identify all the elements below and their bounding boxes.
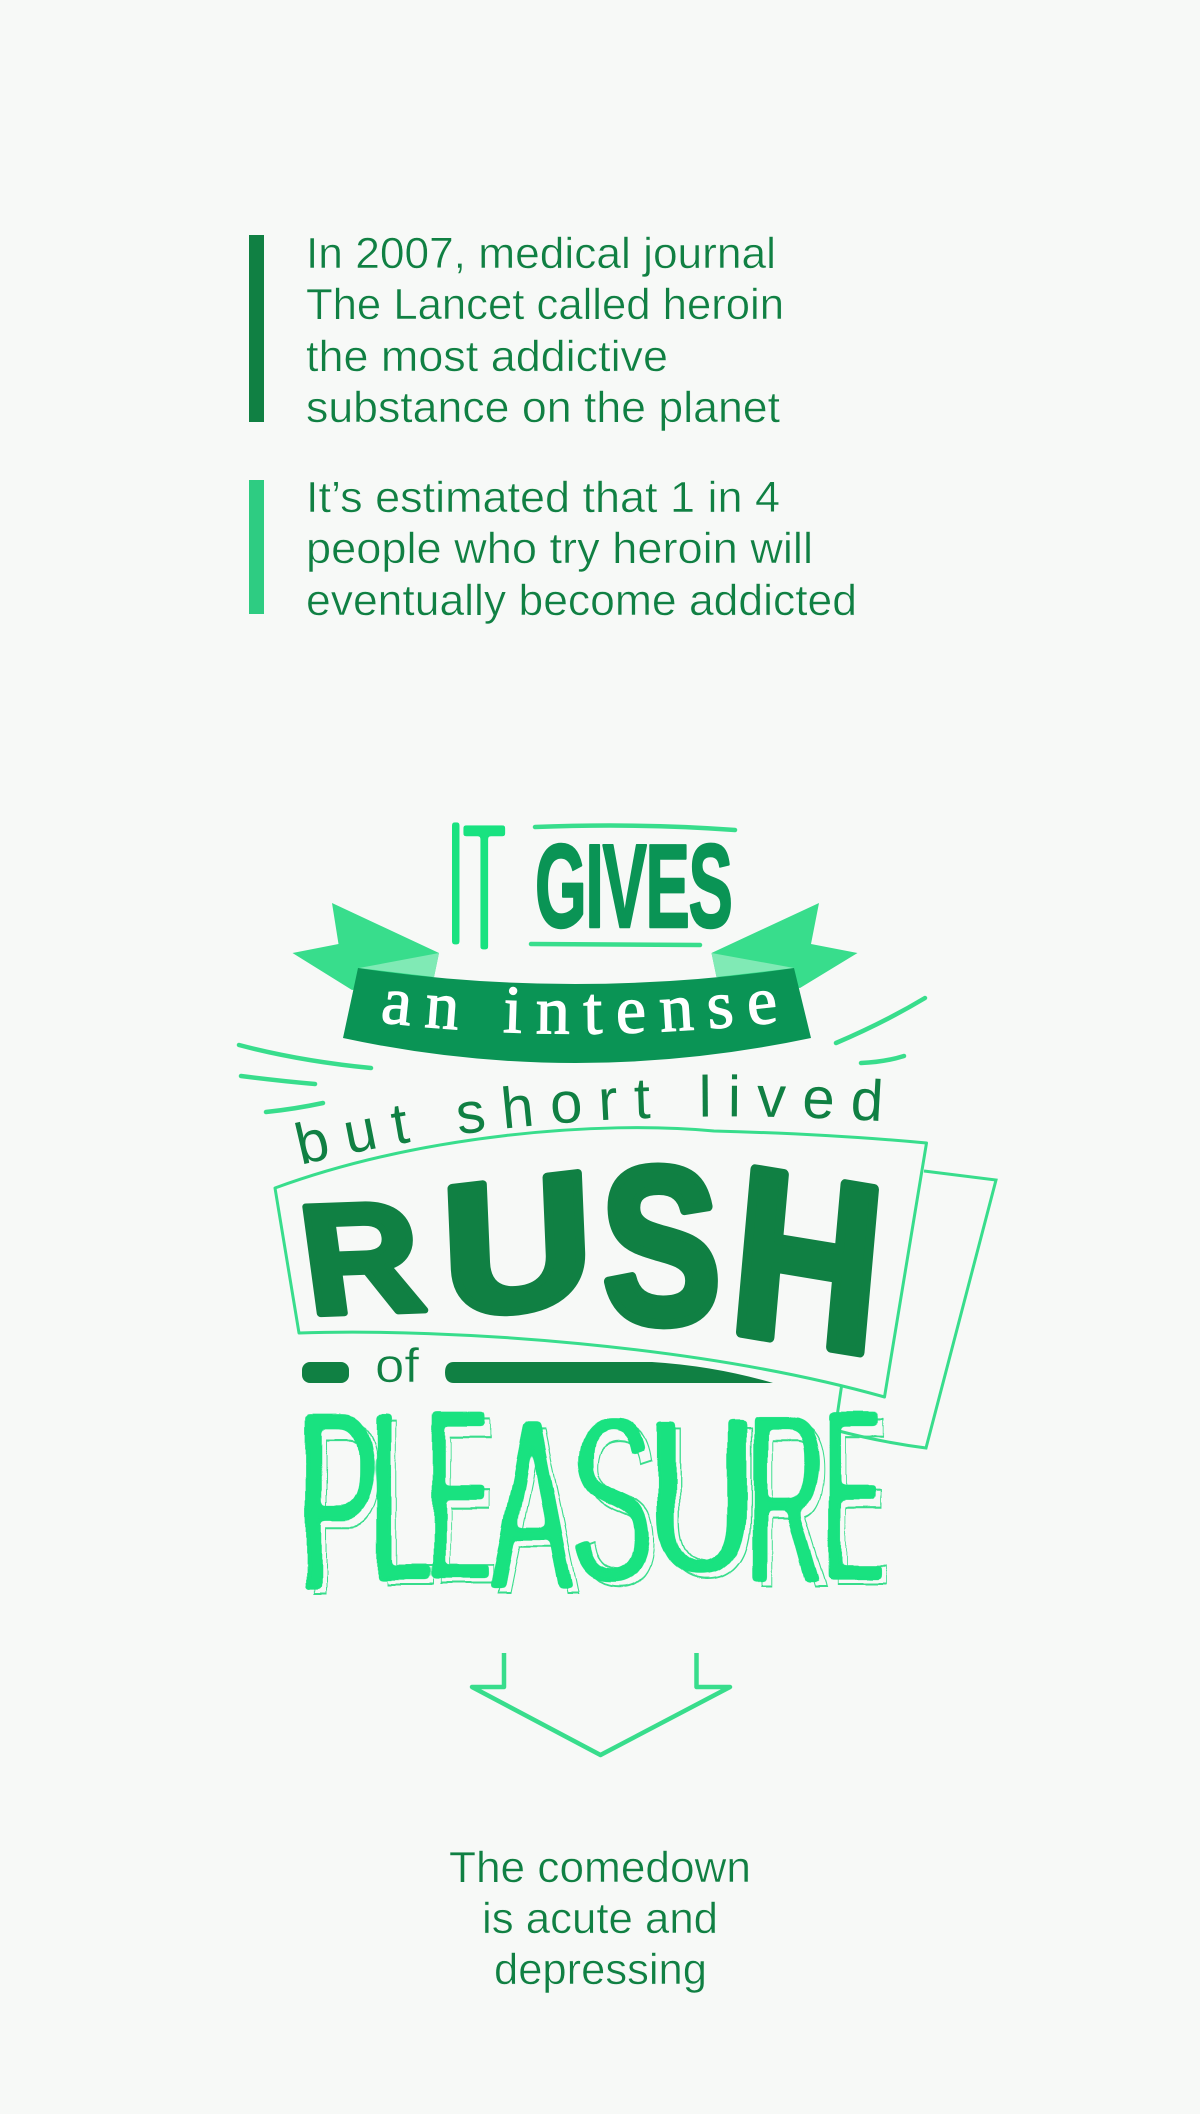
closing text: the comedown: is acute and xyxy=(482,1894,718,1943)
text: Lancet fact: The Lancet called heroin xyxy=(306,280,784,329)
typographic lockup: it gives an intense but short lived rush of pleasure xyxy=(236,783,998,1649)
headline word: PLEASURE: U xyxy=(648,1370,755,1624)
ribbon banner: an intense xyxy=(292,903,858,1063)
headline word: PLEASURE: R xyxy=(746,1361,825,1637)
headline word outline shadow: PLEASURE: P xyxy=(305,1367,385,1648)
headline word outline shadow: PLEASURE: R xyxy=(753,1373,832,1637)
headline word outline shadow: PLEASURE: S xyxy=(579,1379,659,1632)
closing text: the comedown: The comedown xyxy=(449,1843,751,1892)
headline word outline shadow: PLEASURE: A xyxy=(498,1378,579,1646)
headline word: RUSH xyxy=(291,1117,893,1405)
ribbon body xyxy=(343,968,811,1063)
headline word: PLEASURE: S xyxy=(572,1368,652,1631)
text: Lancet fact: substance on the planet xyxy=(306,383,780,432)
text: Lancet fact: the most addictive xyxy=(306,332,668,381)
headline word: PLEASURE xyxy=(298,1355,883,1649)
headline word: PLEASURE: E xyxy=(824,1355,883,1635)
headline word: PLEASURE: E xyxy=(427,1356,490,1636)
headline word outline shadow: PLEASURE xyxy=(305,1367,890,1648)
headline word outline shadow: PLEASURE: E xyxy=(434,1367,497,1635)
closing text: the comedown xyxy=(449,1843,751,1994)
text: Lancet fact xyxy=(306,229,784,432)
text: 1 in 4 fact: It’s estimated that 1 in 4 xyxy=(306,473,780,522)
heading word: GIVES with rules: GIVES xyxy=(535,821,732,953)
subheading: but short lived: but short lived xyxy=(295,1074,881,1164)
back sheet outline xyxy=(835,1171,996,1448)
arrow: down to comedown xyxy=(472,1653,730,1755)
headline word: RUSH: R xyxy=(291,1170,432,1347)
tapered bar right xyxy=(445,1362,773,1383)
fact block: most addictive substance xyxy=(249,229,784,432)
word: of: of xyxy=(375,1340,420,1393)
headline word outline shadow: PLEASURE: L xyxy=(377,1371,438,1635)
ribbon fold right xyxy=(712,953,794,977)
headline word: PLEASURE: L xyxy=(370,1359,431,1635)
ribbon tail right xyxy=(712,903,858,988)
headline word: RUSH: H xyxy=(722,1117,893,1405)
accent bar: light green xyxy=(249,480,264,614)
headline word: RUSH: U xyxy=(438,1132,597,1358)
text: 1 in 4 fact xyxy=(306,473,857,625)
headline word outline shadow: PLEASURE: E xyxy=(831,1368,890,1636)
fact block: 1 in 4 become addicted xyxy=(249,473,857,625)
heading word: IT: T xyxy=(462,784,506,991)
heading word: IT: I xyxy=(446,783,465,986)
closing text: the comedown: depressing xyxy=(494,1945,707,1994)
ribbon tail left xyxy=(292,903,439,990)
dash left xyxy=(302,1362,349,1383)
connector row: of xyxy=(302,1340,773,1393)
front panel outline xyxy=(275,1128,926,1397)
ribbon text: an intense xyxy=(382,986,776,1035)
decorative burst lines xyxy=(239,998,925,1112)
text: 1 in 4 fact: eventually become addicted xyxy=(306,576,857,625)
headline word: RUSH: S xyxy=(598,1120,723,1370)
accent bar: dark green xyxy=(249,235,264,422)
headline word outline shadow: PLEASURE: U xyxy=(655,1382,762,1624)
text: 1 in 4 fact: people who try heroin will xyxy=(306,524,813,573)
headline word: PLEASURE: P xyxy=(298,1357,378,1649)
headline word: PLEASURE: A xyxy=(491,1364,573,1645)
text: Lancet fact: In 2007, medical journal xyxy=(306,229,776,278)
ribbon fold left xyxy=(359,953,439,977)
